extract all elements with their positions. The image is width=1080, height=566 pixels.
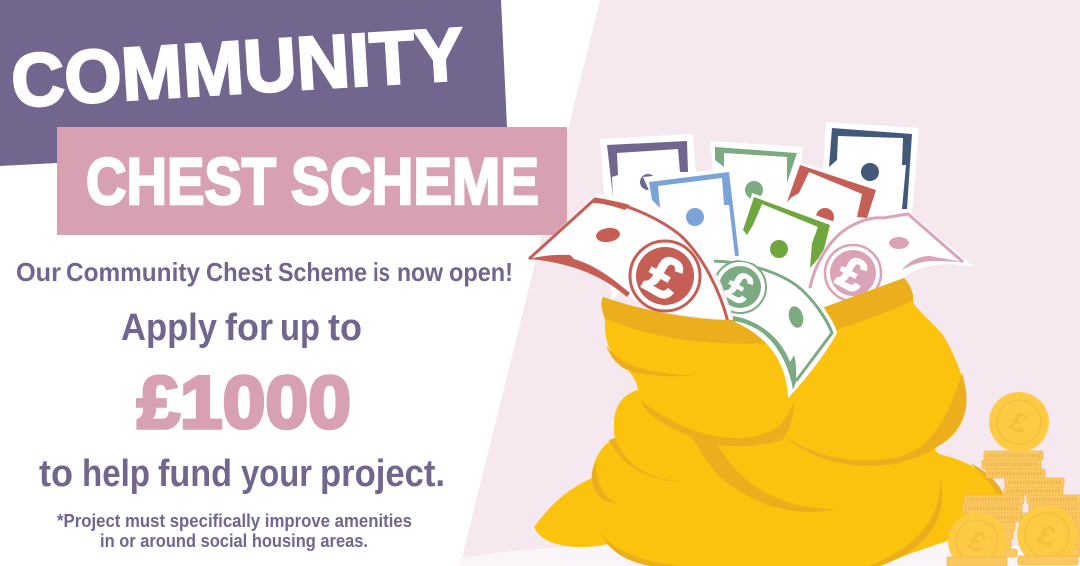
coin: bottom left	[947, 512, 1007, 566]
illustration: pink curved banknote	[806, 211, 974, 310]
banknote: red	[780, 162, 882, 300]
illustration: money bag	[534, 278, 1010, 566]
title banner: CHEST SCHEME: SCHEME	[291, 144, 539, 218]
illustration: red curved banknote: £	[634, 241, 694, 314]
amount: £1000: £1000	[137, 361, 351, 444]
title banner: CHEST SCHEME: CHEST	[86, 144, 276, 218]
coin: top	[989, 392, 1049, 452]
title banner: COMMUNITY: COMMUNITY	[9, 11, 466, 123]
text: apply for up to	[121, 307, 362, 349]
banknote: blue	[643, 168, 742, 280]
coin: bottom left: £	[963, 524, 991, 559]
text: footnote: in or around social housing areas.	[100, 531, 368, 551]
illustration: gold coin stacks	[947, 392, 1080, 566]
title banner: CHEST SCHEME	[57, 127, 567, 235]
banknote: purple	[600, 134, 700, 300]
coin edge ticks	[965, 456, 1078, 544]
text: scheme open notice: Scheme	[278, 257, 367, 287]
text: scheme open notice	[16, 257, 513, 287]
banknote: sage green	[710, 141, 803, 250]
illustration: pink curved banknote: £	[829, 245, 876, 303]
text: footnote	[57, 511, 412, 551]
text: to help fund your project: project.	[320, 453, 445, 495]
text: to help fund your project	[39, 453, 445, 495]
text: to help fund your project: to	[39, 453, 73, 495]
text: scheme open notice: Community	[66, 257, 201, 287]
text: apply for up to: to	[328, 307, 362, 349]
text: scheme open notice: is	[373, 257, 390, 287]
text: apply for up to: up	[280, 307, 320, 349]
illustration: front green curved banknote: £	[718, 261, 762, 314]
illustration: back banknotes	[600, 122, 919, 320]
title banner: COMMUNITY	[0, 0, 507, 166]
text: scheme open notice: open!	[449, 257, 513, 287]
text: scheme open notice: Our	[16, 257, 61, 287]
coin: bottom right	[1017, 505, 1078, 565]
text: footnote: *Project must specifically improve amenities	[57, 511, 412, 531]
text: to help fund your project: help	[82, 453, 150, 495]
illustration: front green curved banknote	[708, 258, 837, 398]
coin: top: £	[1005, 405, 1033, 440]
bag shading	[592, 278, 1003, 566]
banknote: bright green	[730, 193, 850, 320]
text: apply for up to: for	[225, 307, 273, 349]
bag body	[534, 278, 1010, 566]
stacked coins	[962, 451, 1080, 557]
banknote: navy	[820, 122, 919, 235]
text: apply for up to: Apply	[121, 307, 217, 349]
text: to help fund your project: fund	[158, 453, 232, 495]
coin: bottom right: £	[1033, 518, 1061, 553]
text: to help fund your project: your	[241, 453, 312, 495]
illustration: red curved banknote	[526, 194, 733, 322]
text: scheme open notice: Chest	[206, 257, 272, 287]
text: scheme open notice: now	[397, 257, 444, 287]
